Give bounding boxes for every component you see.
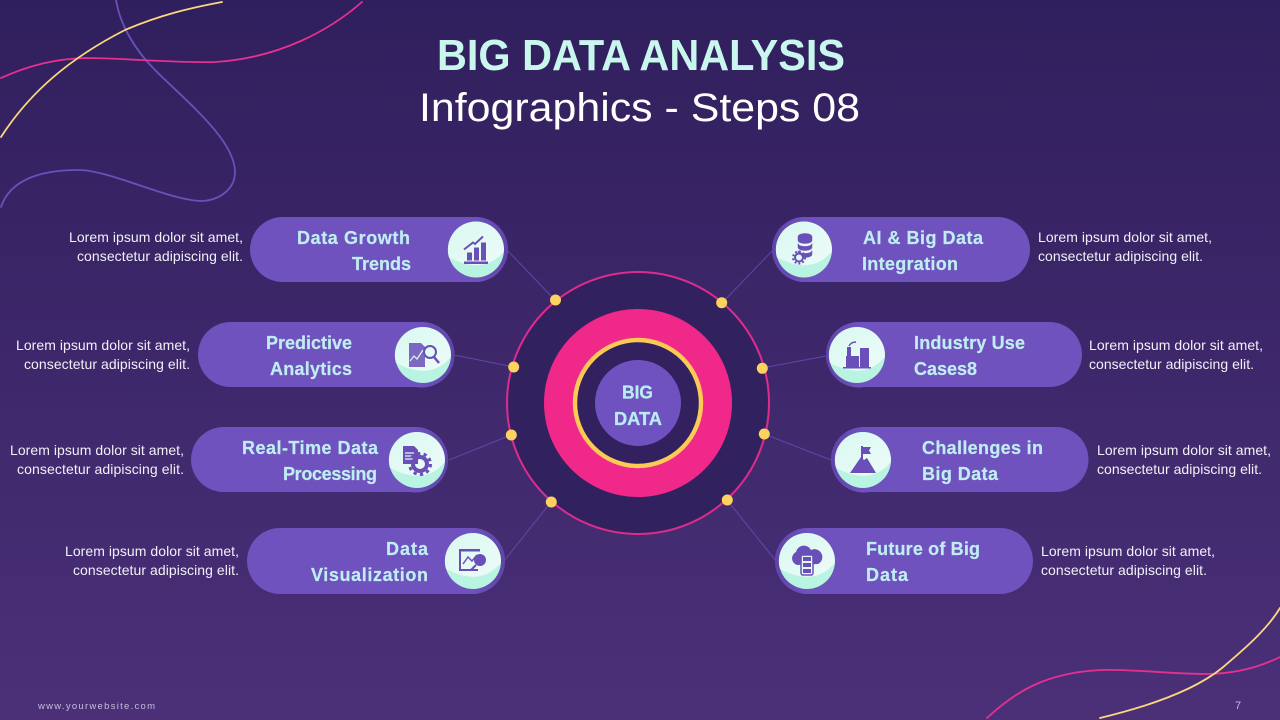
pill — [247, 528, 505, 594]
pill — [250, 217, 508, 282]
label: Trends — [352, 254, 411, 274]
icon: document and gear — [383, 428, 448, 492]
step: Data Growth Trends — [69, 217, 508, 282]
ring dots — [506, 294, 770, 508]
description — [16, 337, 190, 372]
label — [922, 438, 1043, 484]
heading line 2: Infographics - Steps 08 — [419, 86, 860, 130]
step: Industry Use Cases8 — [826, 322, 1263, 388]
footer website: www.yourwebsite.com — [37, 701, 155, 712]
hub label: BIG — [622, 382, 653, 402]
label — [266, 333, 352, 379]
yellow ring — [575, 340, 701, 466]
step: Future of Big Data — [775, 528, 1215, 594]
description: Lorem ipsum dolor sit amet, — [1089, 337, 1263, 353]
description: consectetur adipiscing elit. — [17, 461, 184, 477]
description: consectetur adipiscing elit. — [73, 562, 239, 578]
description: Lorem ipsum dolor sit amet, — [1041, 543, 1215, 559]
label: Data — [866, 565, 909, 585]
label: Cases8 — [914, 359, 977, 379]
label: Future of Big — [866, 539, 980, 559]
description: Lorem ipsum dolor sit amet, — [16, 337, 190, 353]
pill — [775, 528, 1033, 594]
label: Data — [386, 539, 429, 559]
step: Predictive Analytics — [16, 322, 454, 388]
heading line 1: BIG DATA ANALYSIS — [437, 31, 845, 80]
description: Lorem ipsum dolor sit amet, — [10, 442, 184, 458]
icon: mountain with flag — [831, 428, 896, 492]
hub label: DATA — [614, 409, 662, 429]
description — [65, 543, 239, 578]
connector lines — [449, 248, 831, 561]
step: Data Visualization — [65, 528, 505, 594]
description — [1038, 229, 1212, 264]
label — [242, 438, 379, 484]
label — [866, 539, 980, 585]
icon: database and gear — [772, 217, 837, 282]
label: Challenges in — [922, 438, 1043, 458]
step: Real-Time Data Processing — [10, 427, 448, 492]
label — [297, 228, 411, 274]
description: consectetur adipiscing elit. — [1038, 248, 1203, 264]
central hub diagram — [506, 272, 770, 534]
title — [419, 31, 860, 130]
label: Real-Time Data — [242, 438, 379, 458]
description: consectetur adipiscing elit. — [77, 248, 243, 264]
description: Lorem ipsum dolor sit amet, — [69, 229, 243, 245]
description: Lorem ipsum dolor sit amet, — [65, 543, 239, 559]
pill — [831, 427, 1088, 492]
decorative curves: top left — [1, 0, 362, 207]
description: Lorem ipsum dolor sit amet, — [1097, 442, 1271, 458]
outer ring — [507, 272, 769, 534]
hub label — [614, 382, 662, 429]
icon: bar chart growth — [443, 217, 508, 282]
description: consectetur adipiscing elit. — [1041, 562, 1207, 578]
decorative curves: bottom right — [987, 608, 1280, 718]
inner purple circle — [595, 360, 681, 446]
label: Predictive — [266, 333, 352, 353]
pill — [772, 217, 1030, 282]
pill — [191, 427, 448, 492]
description: consectetur adipiscing elit. — [1097, 461, 1262, 477]
pill — [826, 322, 1082, 387]
description — [10, 442, 184, 477]
description: consectetur adipiscing elit. — [24, 356, 190, 372]
description — [1097, 442, 1271, 477]
step: AI and Big Data Integration — [772, 217, 1212, 282]
label — [914, 333, 1025, 379]
label: Processing — [283, 464, 377, 484]
label: Data Growth — [297, 228, 410, 248]
icon: presentation board — [439, 528, 505, 594]
description — [1041, 543, 1215, 578]
icon: cloud server — [775, 528, 841, 594]
description — [69, 229, 243, 264]
label: Big Data — [922, 464, 999, 484]
label: Industry Use — [914, 333, 1025, 353]
label: Visualization — [311, 565, 428, 585]
label: Integration — [862, 254, 958, 274]
pill — [198, 322, 454, 387]
description: consectetur adipiscing elit. — [1089, 356, 1254, 372]
label — [311, 539, 429, 585]
icon: report with magnifier — [390, 322, 454, 388]
step: Challenges in Big Data — [831, 427, 1271, 492]
label: Analytics — [270, 359, 352, 379]
label — [862, 228, 984, 274]
pink disc — [544, 309, 732, 497]
label: AI & Big Data — [863, 228, 984, 248]
description — [1089, 337, 1263, 372]
description: Lorem ipsum dolor sit amet, — [1038, 229, 1212, 245]
icon: factory — [826, 322, 891, 388]
page number: 7 — [1235, 700, 1241, 712]
